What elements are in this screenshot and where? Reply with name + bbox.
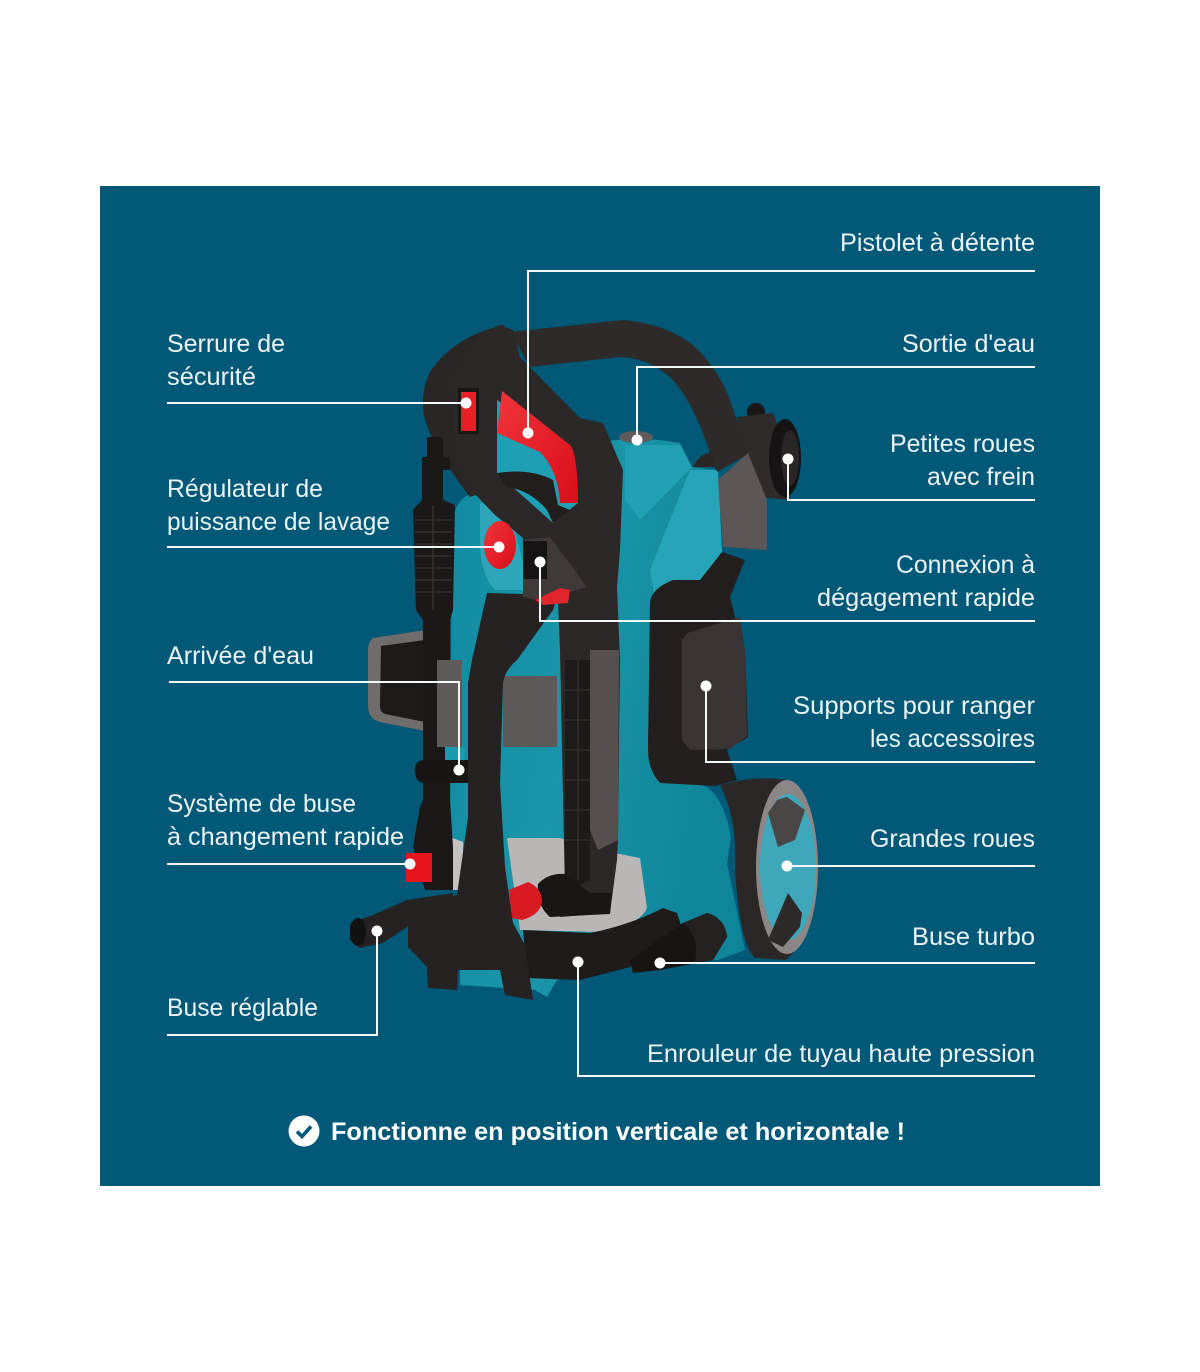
connector: Petites roues (782, 454, 1035, 500)
red power regulator (484, 521, 516, 569)
hose reel (523, 908, 682, 980)
footer statement: Fonctionne en position verticale et horizontale ! (331, 1118, 905, 1146)
connector: Buse turbo (654, 958, 1035, 968)
red release latch (535, 588, 570, 605)
label: Arrivée d'eau: Arrivée d'eau (167, 642, 314, 670)
rear grey accessory box (368, 630, 425, 731)
icon: check badge (288, 1116, 320, 1146)
label: Connexion à dégagement rapide: dégagement rapide (817, 584, 1035, 612)
rear frame tube (423, 325, 505, 497)
grey engine section (507, 838, 647, 932)
label: Connexion à dégagement rapide: Connexion à (896, 551, 1035, 579)
label: Grandes roues: Grandes roues (870, 825, 1035, 853)
label: Petites roues avec frein: avec frein (927, 463, 1035, 491)
label: Serrure de sécurité: sécurité (167, 363, 256, 391)
label: Pistolet à détente: Pistolet à détente (840, 229, 1035, 257)
adjustable nozzle (350, 893, 453, 948)
connection socket (523, 541, 547, 579)
grey lance clip (437, 660, 462, 747)
connector: Enrouleur (572, 956, 1035, 1076)
label: Régulateur de puissance de lavage: puissance de lavage (167, 508, 390, 536)
label: Buse réglable: Buse réglable (167, 994, 318, 1022)
dark inner arch (497, 472, 570, 523)
label: Supports pour ranger les accessoires: les accessoires (870, 725, 1035, 753)
carrying handle (510, 320, 750, 472)
label: Buse turbo: Buse turbo (912, 923, 1035, 951)
teal piece under clip (445, 747, 465, 760)
high pressure lance (413, 437, 468, 890)
gun hose (565, 660, 590, 893)
water inlet connector (415, 760, 468, 783)
connection block (523, 537, 587, 600)
label: Petites roues avec frein: Petites roues (890, 430, 1035, 458)
connector: Système de buse (167, 858, 416, 870)
connector: Serrure de sécurité (167, 398, 472, 408)
label: Connexion à dégagement rapide (817, 551, 1035, 612)
spray gun (453, 325, 623, 917)
grey handle bracket (718, 453, 767, 550)
wheel axle arc (693, 452, 720, 467)
label: Régulateur de puissance de lavage: Régulateur de (167, 475, 323, 503)
light teal facets (480, 445, 722, 598)
label: Système de buse à changement rapide (167, 790, 404, 851)
connector: Buse réglable (167, 926, 382, 1035)
connector: Pistolet (522, 271, 1035, 438)
label: Petites roues avec frein (890, 430, 1035, 491)
label: Système de buse à changement rapide: à changement rapide (167, 823, 404, 851)
label: Enrouleur de tuyau haute pression: Enrouleur de tuyau haute pression (647, 1040, 1035, 1068)
label: Régulateur de puissance de lavage (167, 475, 390, 536)
connector: Supports (700, 680, 1035, 762)
accessory holder (648, 552, 748, 786)
label: Supports pour ranger les accessoires: Supports pour ranger (793, 692, 1035, 720)
main teal body (450, 439, 745, 997)
red trigger (497, 391, 578, 503)
illustration: pressure washer (350, 320, 818, 1000)
grey middle band (503, 676, 557, 747)
label: Supports pour ranger les accessoires (793, 692, 1035, 753)
water outlet cap (619, 431, 653, 443)
connector: Régulateur (167, 542, 504, 552)
base foot and front leg (408, 593, 558, 1000)
lance grip ribs (415, 505, 452, 610)
white engine edge behind lance (450, 837, 463, 890)
label: Système de buse à changement rapide: Système de buse (167, 790, 356, 818)
connector: Arrivée d'eau (169, 682, 464, 776)
label: Serrure de sécurité (167, 330, 285, 391)
panel: background (100, 186, 1100, 1186)
turbo nozzle (630, 913, 727, 973)
connector: Grandes roues (782, 860, 1035, 872)
red safety lock (458, 388, 479, 434)
connector: Connexion (534, 556, 1035, 621)
large wheel (720, 778, 818, 960)
gun barrel grey guard (590, 650, 619, 850)
red drain plug and elbow (509, 874, 612, 920)
small rear wheel with brake (737, 403, 801, 500)
label: Sortie d'eau: Sortie d'eau (902, 330, 1035, 358)
connector: Sortie d'eau (632, 367, 1035, 446)
label: Serrure de sécurité: Serrure de (167, 330, 285, 358)
red quick-change cap (406, 853, 432, 882)
teal through handle (497, 400, 578, 523)
